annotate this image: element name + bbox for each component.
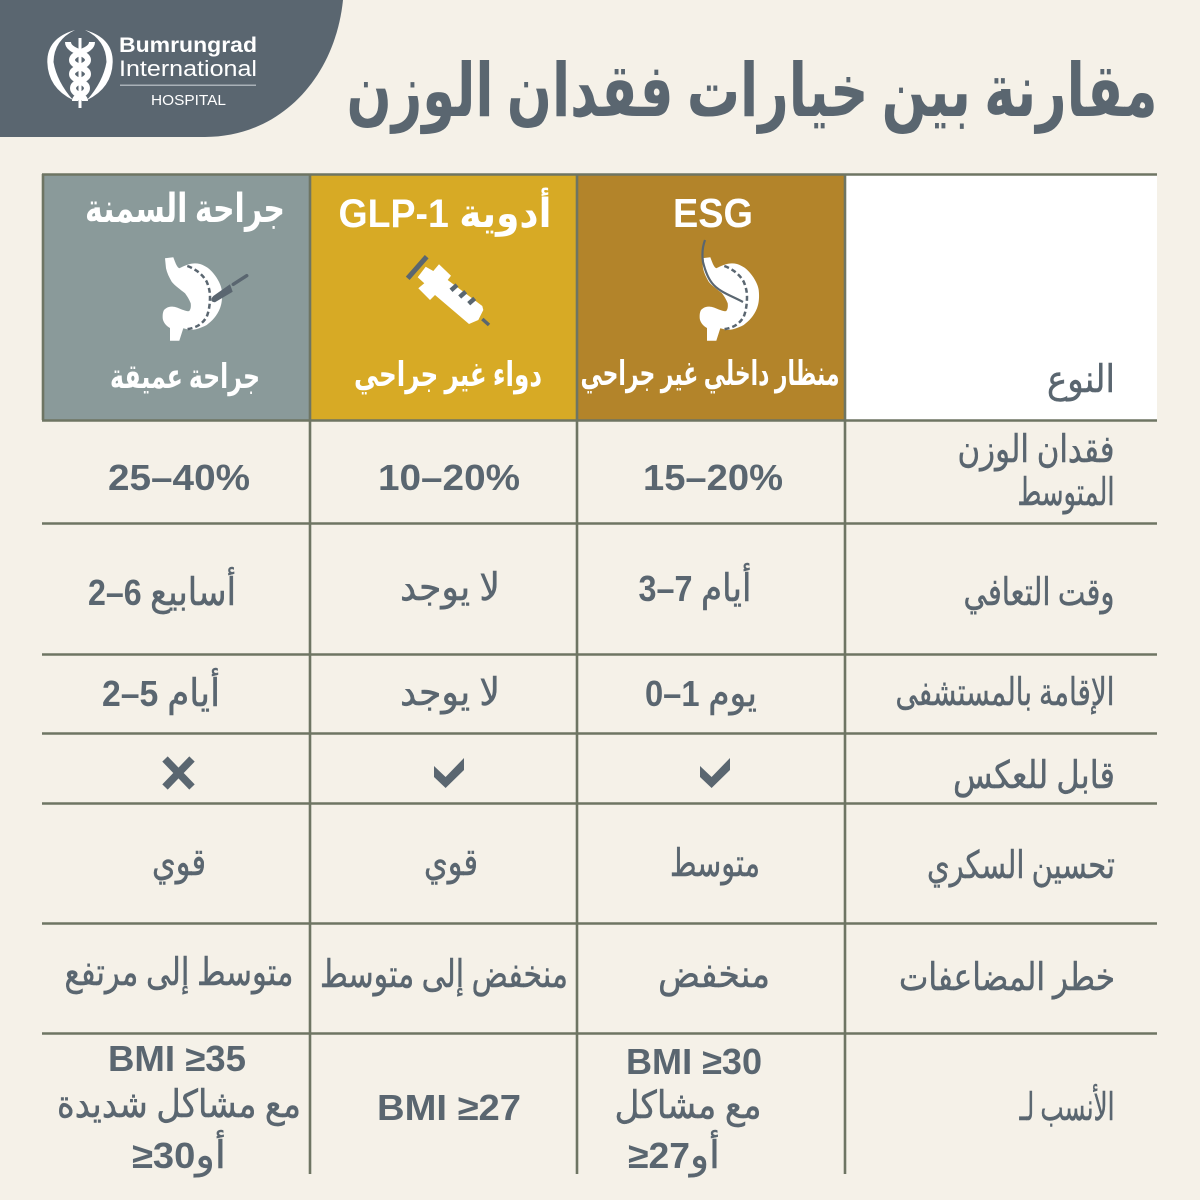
panel: type label header — [846, 175, 1157, 420]
row: best for: الأنسب لـ — [1019, 1083, 1114, 1129]
row: best for — [57, 1038, 1114, 1178]
row: diabetes improvement: تحسين السكري — [927, 845, 1115, 888]
row: recovery time: أسابيع 2–6 — [88, 567, 236, 615]
logo wordmark — [119, 34, 257, 109]
row: complication risk: متوسط إلى مرتفع — [64, 952, 294, 995]
row: average weight loss: 25–40% — [108, 457, 250, 498]
icon: stomach with scalpel — [163, 257, 247, 341]
row: best for: BMI ≥27 — [377, 1087, 521, 1128]
icon: check mark ESG — [700, 758, 730, 788]
row: best for: BMI ≥35 — [108, 1038, 246, 1079]
row: hospital stay: الإقامة بالمستشفى — [896, 672, 1114, 715]
icon: hospital caduceus logo — [47, 30, 113, 108]
row: recovery time: وقت التعافي — [964, 572, 1114, 615]
panel: bariatric surgery column header: جراحة عميقة — [110, 359, 260, 397]
row: average weight loss: 15–20% — [643, 457, 783, 498]
table grid lines — [42, 174, 1157, 1174]
panel: ESG column header: ESG — [673, 190, 753, 236]
row: complication risk — [64, 952, 1115, 1000]
row: average weight loss: فقدان الوزن — [958, 429, 1114, 472]
panel: GLP-1 column header: أدوية GLP-1 — [338, 187, 552, 237]
panel: GLP-1 column header: دواء غير جراحي — [354, 357, 542, 395]
row: hospital stay — [102, 668, 1114, 716]
row: average weight loss: المتوسط — [1018, 472, 1114, 515]
panel: GLP-1 column header — [311, 175, 577, 420]
row: hospital stay: يوم 0–1 — [645, 673, 757, 716]
row: diabetes improvement: قوي — [152, 842, 206, 885]
row: complication risk: خطر المضاعفات — [899, 957, 1115, 1000]
row: diabetes improvement: متوسط — [670, 843, 760, 886]
row: average weight loss: 10–20% — [378, 457, 520, 498]
row: reversible: قابل للعكس — [953, 755, 1115, 797]
row: best for: أو≥30 — [132, 1130, 226, 1178]
row: best for: مع مشاكل — [614, 1085, 762, 1128]
panel: bariatric surgery column header: جراحة السمنة — [85, 186, 285, 232]
row: diabetes improvement — [152, 842, 1115, 888]
row: complication risk: منخفض إلى متوسط — [320, 954, 568, 997]
row: best for: مع مشاكل شديدة — [57, 1084, 301, 1127]
row: best for: أو≥27 — [628, 1130, 720, 1178]
row: diabetes improvement: قوي — [424, 842, 478, 885]
panel: comparison table header — [43, 175, 1157, 420]
row: average weight loss — [108, 429, 1114, 515]
row: complication risk: منخفض — [658, 954, 770, 997]
panel: type label header: النوع — [1047, 359, 1115, 402]
logo wordmark: HOSPITAL — [151, 93, 226, 109]
logo wordmark: Bumrungrad — [119, 34, 257, 57]
row: recovery time: أيام 3–7 — [638, 563, 752, 610]
panel: ESG column header: منظار داخلي غير جراحي — [580, 356, 840, 394]
logo wordmark: International — [119, 56, 257, 81]
row: hospital stay: لا يوجد — [400, 672, 500, 715]
panel: ESG column header — [578, 175, 845, 420]
icon: syringe — [408, 257, 489, 325]
row: hospital stay: أيام 2–5 — [102, 668, 220, 715]
row: best for: BMI ≥30 — [626, 1041, 762, 1082]
icon: cross mark surgery — [165, 759, 192, 787]
row: recovery time: لا يوجد — [400, 567, 500, 610]
icon: stomach with endoscope — [700, 240, 759, 341]
logo banner — [0, 0, 343, 137]
row: reversible — [165, 755, 1115, 797]
panel: bariatric surgery column header — [43, 175, 310, 420]
row: recovery time — [88, 563, 1114, 615]
icon: check mark GLP-1 — [434, 758, 464, 788]
